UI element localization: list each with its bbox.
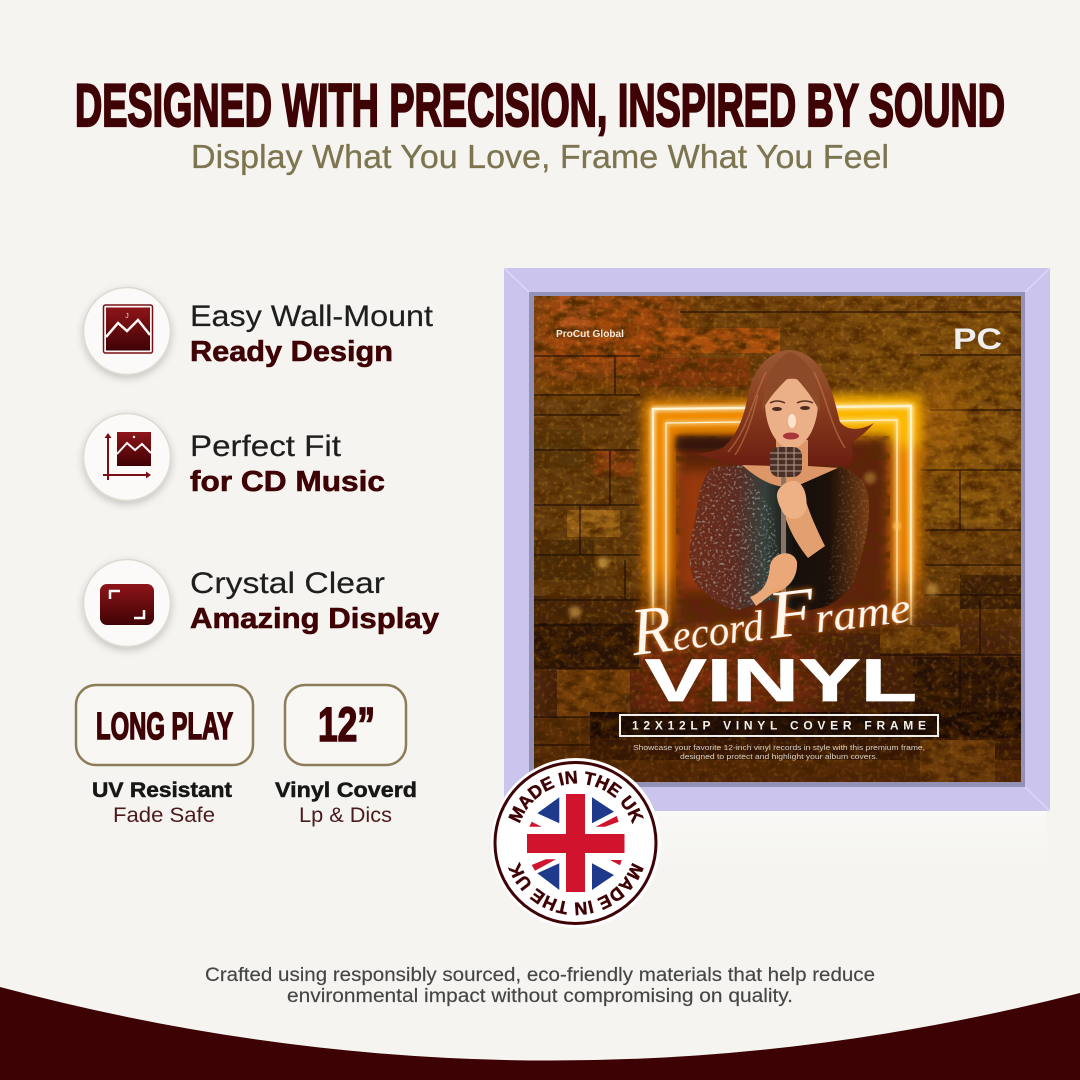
frame reflection [655, 811, 1047, 873]
lavender record frame [504, 268, 1050, 811]
feature label: crystal clear: Crystal Clear [190, 567, 385, 600]
singer with microphone [689, 350, 874, 625]
feature emphasis: amazing display: Amazing Display [190, 603, 439, 635]
made in the UK seal [491, 758, 661, 928]
microphone head [770, 447, 802, 477]
singer neck [742, 440, 840, 490]
light bokeh [569, 472, 938, 618]
seal text top: MADE IN THE UK [508, 770, 644, 824]
icon badge: wall-mount picture [84, 288, 170, 374]
singer forearm [786, 503, 825, 558]
feature label: easy wall-mount: Easy Wall-Mount [190, 300, 434, 333]
neon glow panel [644, 380, 960, 626]
neon square lines [653, 406, 911, 625]
singer upper hand [777, 481, 807, 519]
poster description: Showcase your favorite 12-inch vinyl records in style with this premium frame, [633, 743, 925, 752]
caption: UV resistant [92, 779, 232, 827]
poster description: designed to protect and highlight your album covers. [680, 752, 878, 761]
sustainability statement [205, 965, 875, 1007]
seal text bottom: MADE IN THE UK [508, 862, 644, 916]
badge: 12 inch: 12” [318, 699, 375, 752]
poster script title: Frame [762, 561, 914, 653]
badge: long play [76, 685, 253, 765]
poster script title [631, 584, 912, 660]
badge: long play: LONG PLAY [96, 706, 233, 748]
feature: crystal clear [84, 560, 439, 646]
poster brick wall [534, 290, 1030, 785]
feature label: perfect fit: Perfect Fit [190, 430, 342, 463]
singer lower hand and wrist [750, 553, 797, 606]
icon badge: display [84, 560, 170, 646]
caption: UV resistant: Fade Safe [113, 804, 215, 827]
feature emphasis: for CD music: for CD Music [190, 466, 385, 498]
feature: easy wall-mount [84, 288, 434, 374]
caption: UV resistant: UV Resistant [92, 779, 232, 802]
caption: vinyl covered: Lp & Dics [299, 804, 392, 827]
subtitle: Display What You Love, Frame What You Feel [191, 138, 889, 175]
singer hair [697, 350, 874, 466]
feature: perfect fit [84, 414, 385, 500]
singer hair parting [762, 352, 820, 412]
poster headline VINYL: VINYL [645, 647, 917, 714]
icon badge: wall-mount picture: J [125, 313, 129, 320]
badge: 12 inch [285, 685, 406, 765]
singer eyes and lips [770, 401, 813, 440]
bottom curved band [0, 987, 1080, 1080]
singer dress [689, 465, 869, 612]
sustainability statement: Crafted using responsibly sourced, eco-friendly materials that help reduce [205, 965, 875, 986]
caption: vinyl covered: Vinyl Coverd [275, 779, 417, 802]
dress sequins [689, 465, 780, 610]
poster logo: PC [953, 323, 1002, 356]
singer face [765, 379, 818, 449]
feature emphasis: ready design: Ready Design [190, 336, 393, 368]
hair strands [728, 372, 845, 455]
sustainability statement: environmental impact without compromising on quality. [287, 986, 793, 1007]
poster tagline box: 12X12LP VINYL COVER FRAME [632, 718, 926, 732]
icon badge: dimension picture [84, 414, 170, 500]
union flag [527, 794, 624, 892]
right sleeve sequins [825, 467, 869, 607]
caption: vinyl covered [275, 779, 417, 827]
poster script title: Record [626, 578, 768, 670]
poster artwork [534, 290, 1030, 785]
poster brand name: ProCut Global [556, 328, 624, 340]
poster description [633, 744, 924, 760]
microphone stand [781, 475, 786, 625]
poster tagline box [620, 715, 938, 736]
